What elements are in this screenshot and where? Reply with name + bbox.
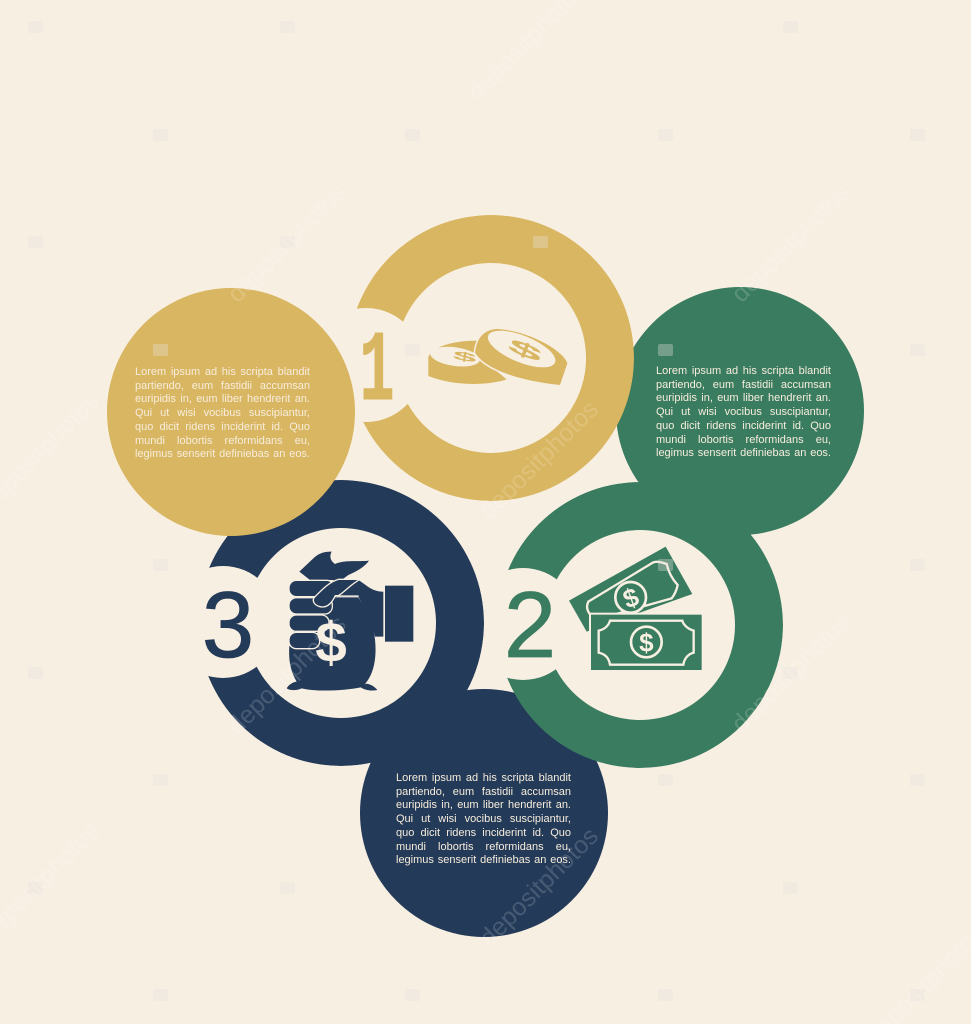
number 3: 3 (202, 572, 254, 677)
text block: navy circle: Lorem ipsum ad his scripta blandit (396, 772, 571, 784)
watermark: depositphotos (474, 395, 604, 525)
text block: green circle: quo dicit ridens inciderint id. Quo (656, 420, 831, 432)
watermark: depositphotos (474, 822, 604, 952)
number 2: 2 (504, 572, 556, 677)
gold text circle (107, 288, 355, 536)
text block: green circle (656, 365, 831, 459)
text block: green circle: Lorem ipsum ad his scripta blandit (656, 365, 831, 377)
text block: green circle: mundi lobortis reformidans eu, (656, 434, 831, 446)
text block: gold circle: Lorem ipsum ad his scripta blandit (135, 366, 310, 378)
text block: navy circle: mundi lobortis reformidans eu, (396, 841, 571, 853)
text block: green circle: legimus senserit definiebas an eos. (656, 447, 831, 459)
text block: gold circle: partiendo, eum fastidii accumsan (135, 380, 310, 392)
icon: coins: $ (452, 348, 478, 365)
text block: green circle: partiendo, eum fastidii accumsan (656, 379, 831, 391)
navy ring 3 (198, 480, 484, 766)
icon: banknotes: $ (639, 627, 654, 657)
icon: banknotes (569, 547, 702, 670)
watermark: depositphotos (726, 178, 856, 308)
text block: gold circle (135, 366, 310, 460)
icon: banknotes: $ (619, 581, 643, 615)
gold ring 1 (348, 215, 634, 501)
green text circle (616, 287, 864, 535)
text block: gold circle: quo dicit ridens inciderint id. Quo (135, 421, 310, 433)
text block: green circle: euripidis in, eum liber hendrerit an. (656, 392, 831, 404)
watermark: depositphotos (222, 178, 352, 308)
text block: navy circle: Qui ut wisi vocibus suscipiantur, (396, 813, 571, 825)
text block: green circle: Qui ut wisi vocibus suscipiantur, (656, 406, 831, 418)
icon: hand holding money bag: $ (315, 612, 347, 675)
text block: navy circle: partiendo, eum fastidii accumsan (396, 786, 571, 798)
text block: gold circle: Qui ut wisi vocibus suscipiantur, (135, 407, 310, 419)
text block: navy circle (396, 772, 571, 866)
number 1: 1 (360, 316, 394, 430)
icon: coins: $ (505, 333, 546, 366)
watermark: depositphotos (222, 610, 352, 740)
text block: navy circle: quo dicit ridens inciderint id. Quo (396, 827, 571, 839)
navy text circle (360, 689, 608, 937)
text block: gold circle: euripidis in, eum liber hendrerit an. (135, 393, 310, 405)
text block: navy circle: legimus senserit definiebas an eos. (396, 854, 571, 866)
watermark: depositphotos (726, 608, 856, 738)
text block: gold circle: legimus senserit definiebas an eos. (135, 448, 310, 460)
icon: hand holding money bag (287, 552, 413, 691)
text block: gold circle: mundi lobortis reformidans eu, (135, 435, 310, 447)
icon: coins (428, 323, 567, 385)
text block: navy circle: euripidis in, eum liber hendrerit an. (396, 799, 571, 811)
green ring 2 (497, 482, 783, 768)
